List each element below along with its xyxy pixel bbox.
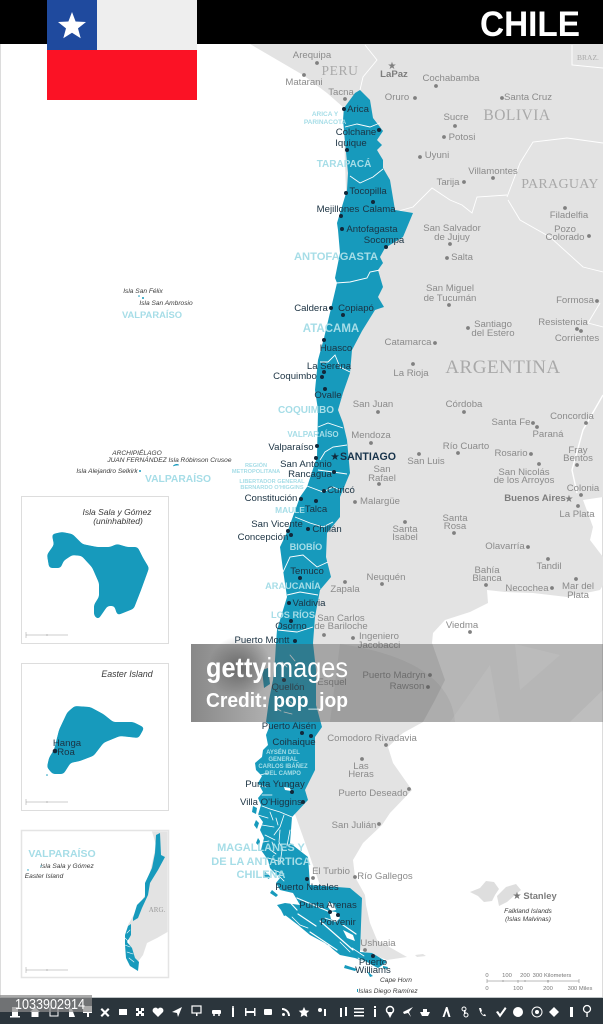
Chile cities: Mejillones xyxy=(317,204,360,215)
Chile cities: Puerto xyxy=(359,957,387,968)
region labels: BIOBÍO xyxy=(290,541,322,552)
getty watermark xyxy=(191,636,603,722)
Chile cities: Tocopilla xyxy=(349,186,387,197)
region labels: COQUIMBO xyxy=(278,405,334,416)
title: CHILE xyxy=(480,5,580,44)
Chile cities: San Antonio xyxy=(280,459,332,470)
inset: Chile locator map: VALPARAÍSO xyxy=(28,847,96,860)
Chile cities: Coquimbo xyxy=(273,371,317,382)
Chile cities: Socompa xyxy=(364,235,405,246)
region labels: CARLOS IBÁÑEZ xyxy=(258,763,308,770)
Argentina cities: Jacobacci xyxy=(358,640,400,651)
scale bar: 200 xyxy=(543,986,553,992)
Argentina cities: Mendoza xyxy=(351,430,391,441)
Argentina cities: de los Arroyos xyxy=(494,475,555,486)
bottom icon bar xyxy=(0,997,603,1024)
inset: Isla Sala y Gómez xyxy=(22,496,168,644)
region labels: ATACAMA xyxy=(303,323,359,335)
inset: Chile locator map: Easter Island xyxy=(25,873,64,880)
region labels: BERNARDO O'HIGGINS xyxy=(240,485,304,491)
Chile cities: Concepción xyxy=(238,532,288,543)
Chilean flag xyxy=(47,0,197,100)
country labels: ARGENTINA xyxy=(445,357,561,378)
region labels: VALPARAÍSO xyxy=(287,430,339,439)
Chile cities: Punta Yungay xyxy=(245,779,305,790)
Chile cities: Villa O'Higgins xyxy=(240,797,302,808)
Stanley and Falkland labels: Islas Diego Ramírez xyxy=(358,988,418,995)
region labels: DE LA ANTÁRTICA xyxy=(211,855,311,868)
region labels: ARAUCANÍA xyxy=(265,580,321,591)
Chile cities: San Vicente xyxy=(251,519,303,530)
Chile cities: Huasco xyxy=(320,343,352,354)
Peru and Bolivia cities: Sucre xyxy=(443,112,469,123)
Chile cities: Valdivia xyxy=(293,598,326,609)
Chile cities: Iquique xyxy=(335,138,367,149)
getty watermark: gettyimages xyxy=(206,652,348,683)
Argentina cities: Puerto Madryn xyxy=(363,670,425,681)
Argentina cities: de Bariloche xyxy=(314,621,368,632)
Argentina cities: San xyxy=(373,464,391,475)
Pacific islands: Juan Fernández archipelago xyxy=(76,448,232,485)
Chile cities: Coihaique xyxy=(272,737,316,748)
Peru and Bolivia cities: Potosi xyxy=(449,132,475,143)
region labels xyxy=(211,111,378,881)
Argentina cities: Heras xyxy=(348,769,374,780)
Chile cities: La Serena xyxy=(307,361,352,372)
Argentina cities: del Estero xyxy=(471,328,515,339)
Argentina cities: San Juan xyxy=(353,399,393,410)
Chile cities: Ovalle xyxy=(314,390,342,401)
Argentina cities: San Miguel xyxy=(426,283,474,294)
region labels: MAGALLANES Y xyxy=(217,842,306,854)
country labels xyxy=(322,53,599,378)
Argentina cities: Neuquén xyxy=(367,572,405,583)
Argentina cities: Colonia xyxy=(567,483,600,494)
Chile mainland xyxy=(252,90,413,992)
scale bar: 300 Miles xyxy=(568,986,593,992)
Argentina cities: San Carlos xyxy=(317,613,365,624)
Peru and Bolivia cities: Tacna xyxy=(328,87,354,98)
inset: Easter Island: Hanga xyxy=(53,738,82,749)
Argentina cities: ★ xyxy=(565,494,574,505)
Pacific islands: Juan Fernández archipelago: ARCHIPIÉLAGO xyxy=(111,448,162,457)
Argentina cities: Blanca xyxy=(472,573,502,584)
Pacific islands: Juan Fernández archipelago: Isla Alejandro Selkirk xyxy=(76,468,138,475)
Chile cities: Constitución xyxy=(245,493,297,504)
region labels: ARICA Y xyxy=(312,111,339,118)
Argentina cities: Ingeniero xyxy=(359,631,399,642)
Argentina cities: Río Gallegos xyxy=(357,871,413,882)
country labels: PARAGUAY xyxy=(521,177,599,192)
Argentina cities: Fray xyxy=(568,445,588,456)
Pacific islands: Juan Fernández archipelago: VALPARAÍSO xyxy=(145,472,211,485)
Chile cities xyxy=(235,104,405,976)
scale bar: 0 xyxy=(485,986,489,992)
region labels: DEL CAMPO xyxy=(265,771,301,777)
Argentina cities: Tandil xyxy=(536,561,562,572)
Chile cities: Calama xyxy=(362,204,396,215)
Stanley and Falkland labels xyxy=(358,890,557,995)
Chile cities: Porvenir xyxy=(320,917,357,928)
Argentina cities: La Rioja xyxy=(393,368,429,379)
Pacific islands: San Félix and San Ambrosio: VALPARAÍSO xyxy=(122,309,182,320)
Pacific islands: San Félix and San Ambrosio xyxy=(122,288,193,320)
Argentina cities: Río Cuarto xyxy=(443,441,489,452)
Argentina cities: Comodoro Rivadavia xyxy=(327,733,417,744)
Argentina cities: Corrientes xyxy=(555,333,599,344)
Peru and Bolivia cities xyxy=(285,50,591,243)
Peru and Bolivia cities: Villamontes xyxy=(468,166,518,177)
country labels: PERU xyxy=(322,63,358,78)
Pacific islands: Juan Fernández archipelago: Isla Róbinson Crusoe xyxy=(168,457,232,464)
Argentina cities: Formosa xyxy=(556,295,595,306)
Chile cities: Puerto Natales xyxy=(275,882,339,893)
Argentina cities: Isabel xyxy=(392,532,418,543)
Chile cities: Osorno xyxy=(275,621,307,632)
Argentina cities: de Jujuy xyxy=(434,232,470,243)
Pacific islands: San Félix and San Ambrosio: Isla San Félix xyxy=(123,288,163,295)
Argentina cities: Santa Fe xyxy=(492,417,530,428)
inset: Isla Sala y Gómez: Isla Sala y Gómez xyxy=(83,507,152,517)
Chile cities: ★ xyxy=(330,451,340,463)
Argentina cities: La Plata xyxy=(559,509,595,520)
Argentina cities: Bentos xyxy=(563,453,593,464)
Pacific islands: Juan Fernández archipelago: JUAN FERNÁNDEZ xyxy=(106,455,168,464)
Argentina cities: Salta xyxy=(451,252,474,263)
Chile cities: Puerto Aisén xyxy=(262,721,316,732)
Peru and Bolivia cities: Pozo xyxy=(554,224,576,235)
Argentina cities: Plata xyxy=(567,590,590,601)
getty watermark: Credit: pop_jop xyxy=(206,690,348,712)
Argentina cities: Necochea xyxy=(505,583,549,594)
Argentina cities: Rafael xyxy=(368,473,396,484)
region labels: ANTOFAGASTA xyxy=(294,251,378,263)
region labels: METROPOLITANA xyxy=(232,469,280,475)
Peru and Bolivia cities: Santa Cruz xyxy=(504,92,552,103)
Argentina cities: San Salvador xyxy=(423,223,482,234)
Peru and Bolivia cities: LaPaz xyxy=(380,69,408,80)
Peru and Bolivia cities: Arequipa xyxy=(293,50,332,61)
Chile cities: Colchane xyxy=(336,127,376,138)
Argentina cities: Olavarría xyxy=(485,541,525,552)
inset: Easter Island: Easter Island xyxy=(101,669,154,679)
Argentina cities: Córdoba xyxy=(446,399,483,410)
Chile cities: Talca xyxy=(305,504,328,515)
Chile cities: Quellón xyxy=(271,682,305,693)
Argentina cities: San Julián xyxy=(332,820,376,831)
inset: Easter Island: Roa xyxy=(57,747,75,758)
Argentina cities: Ushuaia xyxy=(360,938,396,949)
Stanley and Falkland labels: Stanley xyxy=(523,890,557,901)
scale bar: 0 xyxy=(485,973,489,979)
Chile cities: SANTIAGO xyxy=(340,451,396,463)
Argentina cities: Santa xyxy=(392,524,418,535)
Argentina cities: Las xyxy=(353,761,369,772)
Argentina cities: Rosario xyxy=(494,448,528,459)
region labels: AYSÉN DEL xyxy=(266,748,300,756)
header bar xyxy=(0,0,603,44)
Argentina cities: San Nicolás xyxy=(498,467,550,478)
Argentina cities: Resistencia xyxy=(538,317,588,328)
Argentina cities: de Tucumán xyxy=(424,293,476,304)
Argentina cities: Viedma xyxy=(446,620,479,631)
region labels: LIBERTADOR GENERAL xyxy=(239,479,305,485)
Chile cities: Arica xyxy=(347,104,370,115)
Argentina cities: Mar del xyxy=(562,581,594,592)
Peru and Bolivia cities: Tarija xyxy=(437,177,460,188)
Chile cities: Copiapó xyxy=(338,303,374,314)
country labels: BRAZ. xyxy=(577,53,599,62)
region labels: PARINACOTA xyxy=(304,119,346,126)
Chile cities: Caldera xyxy=(294,303,328,314)
region labels: REGIÓN xyxy=(245,461,267,469)
Stanley and Falkland labels: (Islas Malvinas) xyxy=(505,916,551,923)
Argentina cities: Paraná xyxy=(533,429,564,440)
Argentina cities: Concordia xyxy=(550,411,595,422)
Stanley and Falkland labels: ★ xyxy=(513,891,522,902)
Chile cities: Punta Arenas xyxy=(299,900,357,911)
Argentina cities xyxy=(311,223,600,952)
Chile cities: Williams xyxy=(355,965,391,976)
Stanley and Falkland labels: Cape Horn xyxy=(380,977,412,984)
Peru and Bolivia cities: Matarani xyxy=(285,77,323,88)
region labels: MAULE xyxy=(275,505,305,515)
region labels: TARAPACÁ xyxy=(317,157,371,170)
Pacific islands: San Félix and San Ambrosio: Isla San Ambrosio xyxy=(139,300,193,307)
Argentina cities: Buenos Aires xyxy=(504,493,566,504)
scale bar: 200 xyxy=(520,973,530,979)
Argentina cities: Rosa xyxy=(444,521,467,532)
Chile cities: Rancagua xyxy=(288,469,333,480)
region borders xyxy=(278,123,383,632)
scale bar: 100 xyxy=(502,973,512,979)
inset: Isla Sala y Gómez: (uninhabited) xyxy=(93,516,143,526)
inset: Easter Island xyxy=(22,664,168,810)
Peru and Bolivia cities: ★ xyxy=(388,61,397,72)
Argentina cities: Esquel xyxy=(317,677,347,688)
Argentina cities: Puerto Deseado xyxy=(338,788,408,799)
scale bar: 100 xyxy=(513,986,523,992)
region labels: GENERAL xyxy=(268,757,298,763)
Chile cities: Chillán xyxy=(312,524,342,535)
country labels: BOLIVIA xyxy=(483,107,551,124)
region labels: LOS RÍOS xyxy=(271,609,315,620)
Falkland Islands xyxy=(470,881,521,906)
Peru and Bolivia cities: Uyuni xyxy=(425,150,449,161)
scale bar xyxy=(485,973,593,992)
Argentina cities: Bahía xyxy=(474,565,500,576)
Argentina cities: El Turbio xyxy=(312,866,350,877)
Chile cities: Antofagasta xyxy=(346,224,398,235)
Argentina cities: Santa xyxy=(442,513,468,524)
Peru and Bolivia cities: Filadelfia xyxy=(550,210,589,221)
Chile cities: Valparaíso xyxy=(268,442,314,453)
region labels: CHILENA xyxy=(237,869,285,881)
Argentina cities: San Luis xyxy=(407,456,445,467)
Argentina cities: Catamarca xyxy=(385,337,432,348)
image id tag: 1033902914 xyxy=(15,996,85,1013)
Argentina cities: Rawson xyxy=(390,681,424,692)
Stanley and Falkland labels: Falkland Islands xyxy=(504,908,553,915)
Peru and Bolivia cities: Oruro xyxy=(385,92,409,103)
Chile cities: Puerto Montt xyxy=(235,635,290,646)
Argentina cities: Zapala xyxy=(330,584,360,595)
inset: Chile locator map xyxy=(22,830,168,978)
Peru and Bolivia cities: Cochabamba xyxy=(422,73,480,84)
Chile cities: Curicó xyxy=(327,485,355,496)
Chile cities: Temuco xyxy=(290,566,324,577)
Peru and Bolivia cities: Colorado xyxy=(546,232,584,243)
Argentina cities: Santiago xyxy=(474,319,512,330)
fjords and southern islands xyxy=(252,655,388,992)
inset: Chile locator map: ARG. xyxy=(149,906,166,914)
inset: Chile locator map: Isla Sala y Gómez xyxy=(40,863,94,870)
neighbouring land: Peru, Bolivia, Paraguay, Argentina xyxy=(250,44,603,960)
scale bar: 300 Kilometers xyxy=(533,973,571,979)
Argentina cities: Malargüe xyxy=(360,496,400,507)
